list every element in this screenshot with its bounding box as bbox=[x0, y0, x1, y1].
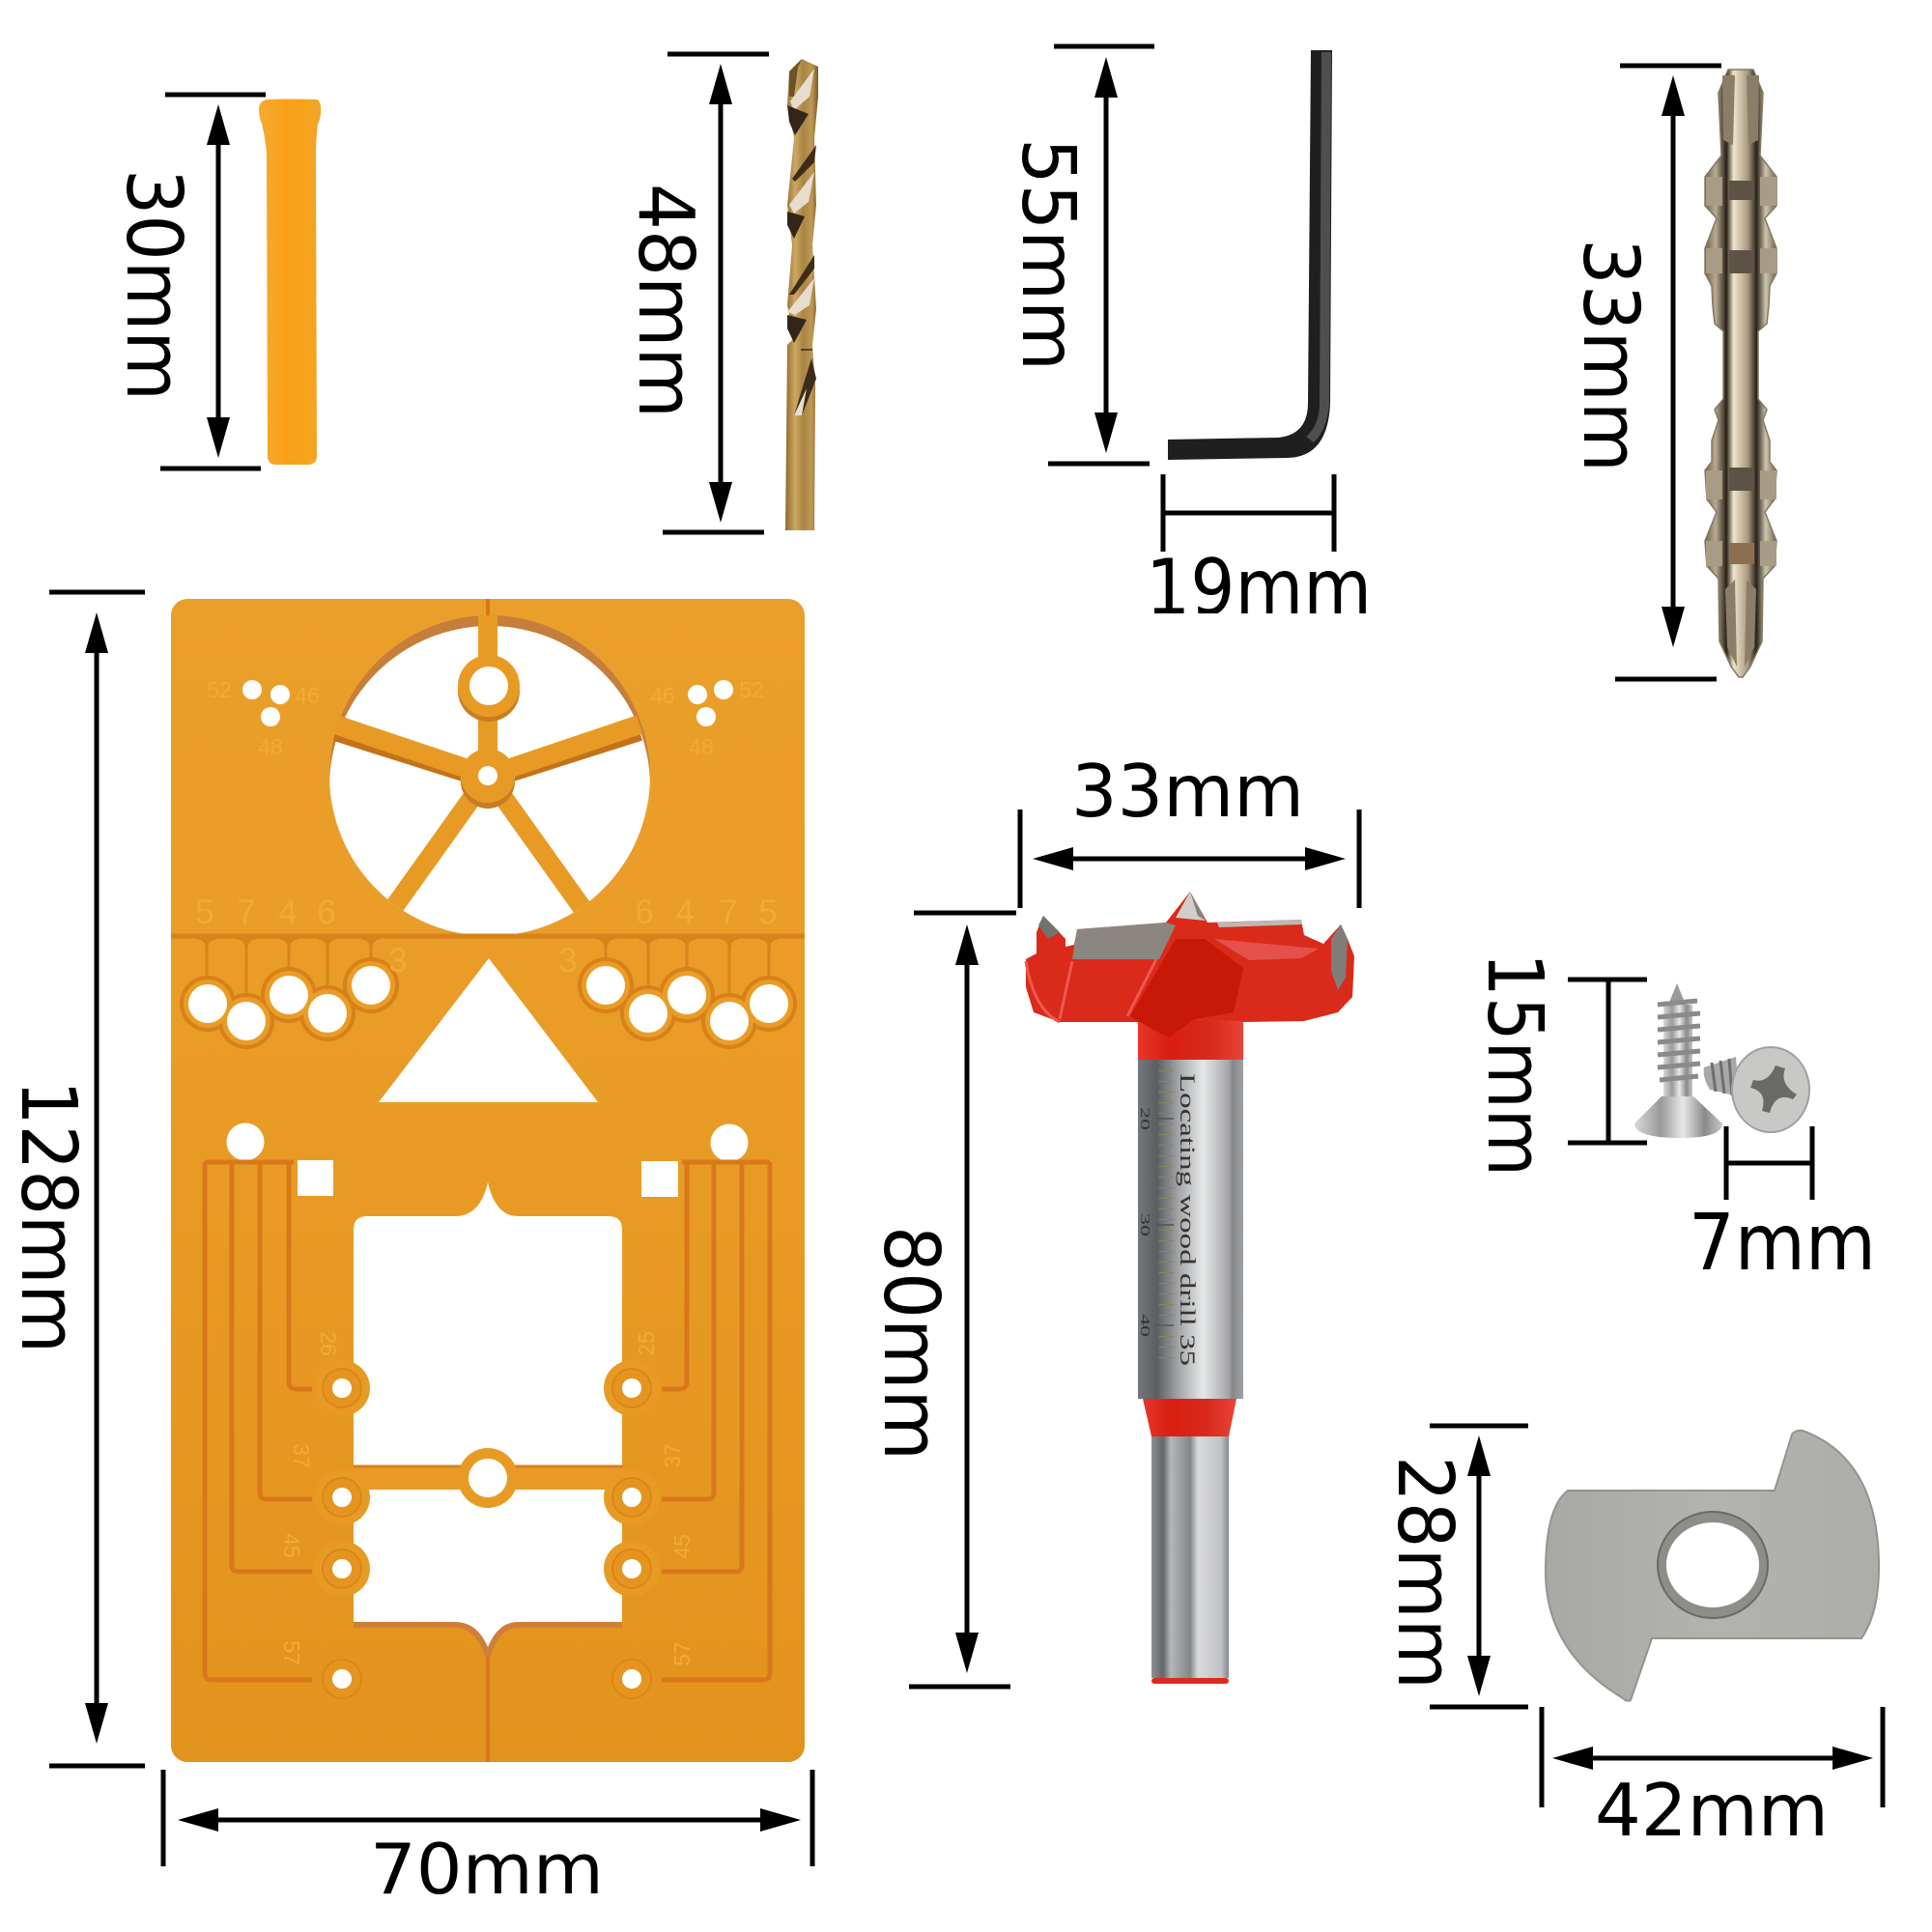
embossed numbers: 6 bbox=[635, 894, 654, 931]
horizontal groove and comb bbox=[171, 936, 805, 1000]
hex collars bbox=[1706, 177, 1776, 566]
rotated embossed numbers: 26 bbox=[316, 1331, 341, 1356]
window inner shadow edge bbox=[354, 1625, 622, 1656]
small triple holes bbox=[242, 680, 733, 726]
drill body bbox=[785, 59, 818, 530]
red tip bbox=[1151, 1678, 1229, 1684]
dimension: 33mm head: 33mm bbox=[1071, 749, 1304, 834]
driver tip flutes bbox=[1722, 75, 1759, 667]
icon: hex key bbox=[1168, 50, 1332, 460]
icon: double ended screwdriver bit bbox=[1705, 70, 1776, 677]
cutter head bbox=[1026, 892, 1354, 1038]
plate body bbox=[171, 599, 805, 1762]
embossed numbers: 52 bbox=[207, 677, 232, 702]
dimension: 15mm bbox=[1470, 952, 1647, 1177]
dimension: 19mm: 19mm bbox=[1146, 543, 1372, 633]
depth ruler bbox=[1155, 1070, 1174, 1363]
rotated embossed numbers: 45 bbox=[669, 1534, 695, 1559]
embossed numbers: 3 bbox=[388, 942, 408, 980]
left spur bbox=[1038, 916, 1060, 939]
dimension: 42mm: 42mm bbox=[1595, 1768, 1829, 1853]
row of round holes, left bbox=[180, 957, 399, 1049]
ruler numbers: 30 bbox=[1137, 1213, 1151, 1236]
rotated embossed numbers: 25 bbox=[634, 1331, 659, 1356]
embossed numbers bbox=[195, 677, 778, 980]
flutes top turn bbox=[787, 69, 814, 135]
centre spur bbox=[1176, 892, 1206, 921]
dimension: 15mm: 15mm bbox=[1470, 952, 1559, 1177]
panel: orange hinge jig template bbox=[171, 599, 805, 1762]
red collar bbox=[1138, 1019, 1243, 1060]
embossed numbers: 4 bbox=[675, 894, 695, 931]
head dark centre facet bbox=[1130, 939, 1243, 1038]
embossed numbers: 46 bbox=[650, 683, 675, 708]
flutes second turn bbox=[787, 145, 816, 239]
dimension: 28mm: 28mm bbox=[1380, 1456, 1469, 1690]
tip flute bbox=[789, 59, 802, 97]
screw one thread bbox=[1658, 983, 1700, 1096]
icon: wood screws bbox=[1634, 983, 1809, 1138]
spokes bbox=[335, 609, 639, 918]
dimension: 55mm bbox=[1005, 46, 1154, 464]
head rim highlight bbox=[1026, 959, 1156, 1022]
dimension: 128mm bbox=[4, 592, 145, 1766]
screw bosses bbox=[314, 1360, 660, 1698]
large circular opening bbox=[329, 615, 650, 947]
L shaped grooves left bbox=[205, 1162, 312, 1680]
dimension: 55mm: 55mm bbox=[1005, 138, 1091, 371]
centre seam bbox=[486, 599, 490, 1762]
embossed numbers: 3 bbox=[558, 942, 578, 980]
shank bbox=[1151, 1436, 1229, 1678]
embossed numbers: 52 bbox=[739, 677, 764, 702]
dimension: 7mm: 7mm bbox=[1689, 1196, 1876, 1291]
flute run-out bbox=[794, 350, 816, 415]
embossed numbers: 5 bbox=[195, 894, 214, 931]
rotated embossed numbers: 57 bbox=[669, 1641, 695, 1666]
embossed numbers: 6 bbox=[317, 894, 336, 931]
dimension: 30mm: 30mm bbox=[109, 169, 198, 401]
dimension: 48mm bbox=[621, 54, 769, 532]
dimension: 19mm bbox=[1140, 474, 1381, 633]
rotated embossed numbers: 37 bbox=[660, 1443, 685, 1468]
dimension: 70mm bbox=[163, 1770, 812, 1910]
screw two thread bbox=[1704, 1057, 1739, 1096]
right spur bbox=[1331, 924, 1348, 990]
key body bbox=[1168, 50, 1332, 460]
bit profile bbox=[1705, 70, 1776, 677]
ruler numbers: 40 bbox=[1137, 1314, 1151, 1337]
dimension: 30mm bbox=[109, 95, 266, 469]
red neck bbox=[1143, 1399, 1236, 1436]
plate bbox=[1546, 1431, 1879, 1701]
key highlight bbox=[1306, 52, 1331, 442]
dimension: 7mm bbox=[1686, 1126, 1889, 1291]
dimension: 33mm head bbox=[1020, 749, 1359, 908]
head light facet bbox=[1214, 939, 1319, 960]
row of round holes, right bbox=[578, 957, 797, 1049]
embossed numbers: 4 bbox=[278, 894, 298, 931]
dimension: 33mm bit bbox=[1566, 66, 1721, 679]
ruler numbers: 20 bbox=[1137, 1107, 1151, 1130]
dimension: 70mm: 70mm bbox=[370, 1829, 604, 1910]
ruler numbers bbox=[1137, 1107, 1151, 1337]
embossed numbers: 5 bbox=[758, 894, 778, 931]
hex flats bbox=[1729, 181, 1754, 564]
rotated embossed numbers: 45 bbox=[279, 1533, 304, 1558]
icon: latch plate bbox=[1546, 1431, 1879, 1701]
flutes third turn bbox=[787, 255, 814, 343]
icon: gold drill bit bbox=[785, 59, 818, 530]
cross bar with ring bbox=[354, 1448, 623, 1508]
locating holes and squares bbox=[226, 1122, 748, 1197]
embossed numbers: 48 bbox=[689, 734, 714, 759]
embossed numbers: 7 bbox=[237, 894, 256, 931]
dimension: 33mm bit: 33mm bbox=[1566, 239, 1655, 472]
L shaped grooves right bbox=[662, 1162, 770, 1680]
rotated embossed numbers: 57 bbox=[279, 1640, 304, 1665]
dimension: 28mm bbox=[1380, 1426, 1528, 1707]
engraved label: Locating wood drill 35 bbox=[1176, 1073, 1200, 1366]
hole bbox=[1666, 1522, 1759, 1607]
dimension: 48mm: 48mm bbox=[621, 184, 710, 418]
rotated embossed numbers: 37 bbox=[289, 1443, 314, 1468]
screw two head bbox=[1732, 1047, 1809, 1132]
triangle cutout bbox=[379, 958, 598, 1102]
icon: forstner wood drill bit bbox=[1026, 892, 1354, 1684]
embossed numbers: 48 bbox=[258, 734, 283, 759]
icon: orange pin bbox=[259, 99, 321, 465]
dimension: 42mm bbox=[1542, 1707, 1883, 1853]
central window bbox=[354, 1182, 622, 1658]
screw one head bbox=[1634, 1096, 1722, 1138]
top right strip bbox=[1217, 920, 1302, 927]
embossed numbers: 7 bbox=[719, 894, 738, 931]
embossed numbers: 46 bbox=[295, 683, 320, 708]
dimension: 128mm: 128mm bbox=[4, 1080, 93, 1353]
dimension: 80mm bbox=[867, 913, 1016, 1687]
hole ring bbox=[1658, 1512, 1768, 1618]
dimension: 80mm: 80mm bbox=[867, 1226, 955, 1461]
rotated embossed numbers bbox=[279, 1331, 695, 1666]
steel body bbox=[1138, 1060, 1243, 1399]
grey cutter bbox=[1072, 923, 1176, 959]
